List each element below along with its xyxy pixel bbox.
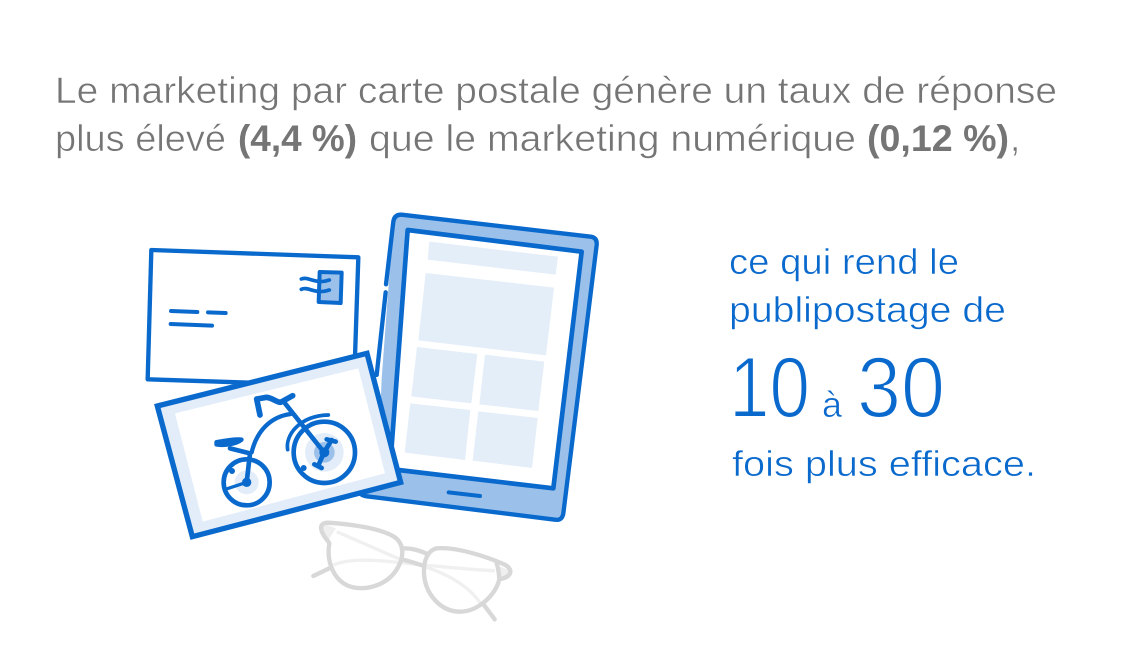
callout text: ce qui rend le <box>729 241 959 282</box>
icon: envelope <box>148 250 358 383</box>
tablet home button <box>449 492 480 496</box>
heading text: plus élevé <box>55 118 226 159</box>
heading text: que le marketing numérique <box>369 118 856 159</box>
bicycle <box>217 396 355 505</box>
heading text: , <box>1010 118 1020 159</box>
heading text: Le marketing par carte postale génère un taux de réponse <box>55 70 1057 111</box>
big numbers: 10 <box>729 340 810 436</box>
icon: postcard with bicycle <box>157 353 401 537</box>
icon: tablet <box>361 215 597 520</box>
address lines <box>171 311 226 326</box>
tablet screen <box>390 230 582 488</box>
callout text: fois plus efficace. <box>732 443 1036 484</box>
heading text: (0,12 %) <box>867 118 1009 159</box>
callout text: publipostage de <box>729 289 1006 330</box>
big numbers: à <box>822 384 843 425</box>
stamp <box>319 272 342 303</box>
postmark waves <box>301 278 329 292</box>
icon: glasses <box>313 523 510 619</box>
big numbers: 30 <box>857 340 945 436</box>
big numbers <box>729 340 945 436</box>
screen content blocks <box>405 242 558 468</box>
heading text: (4,4 %) <box>238 118 357 159</box>
heading text <box>55 70 1057 159</box>
callout text <box>729 241 1036 484</box>
